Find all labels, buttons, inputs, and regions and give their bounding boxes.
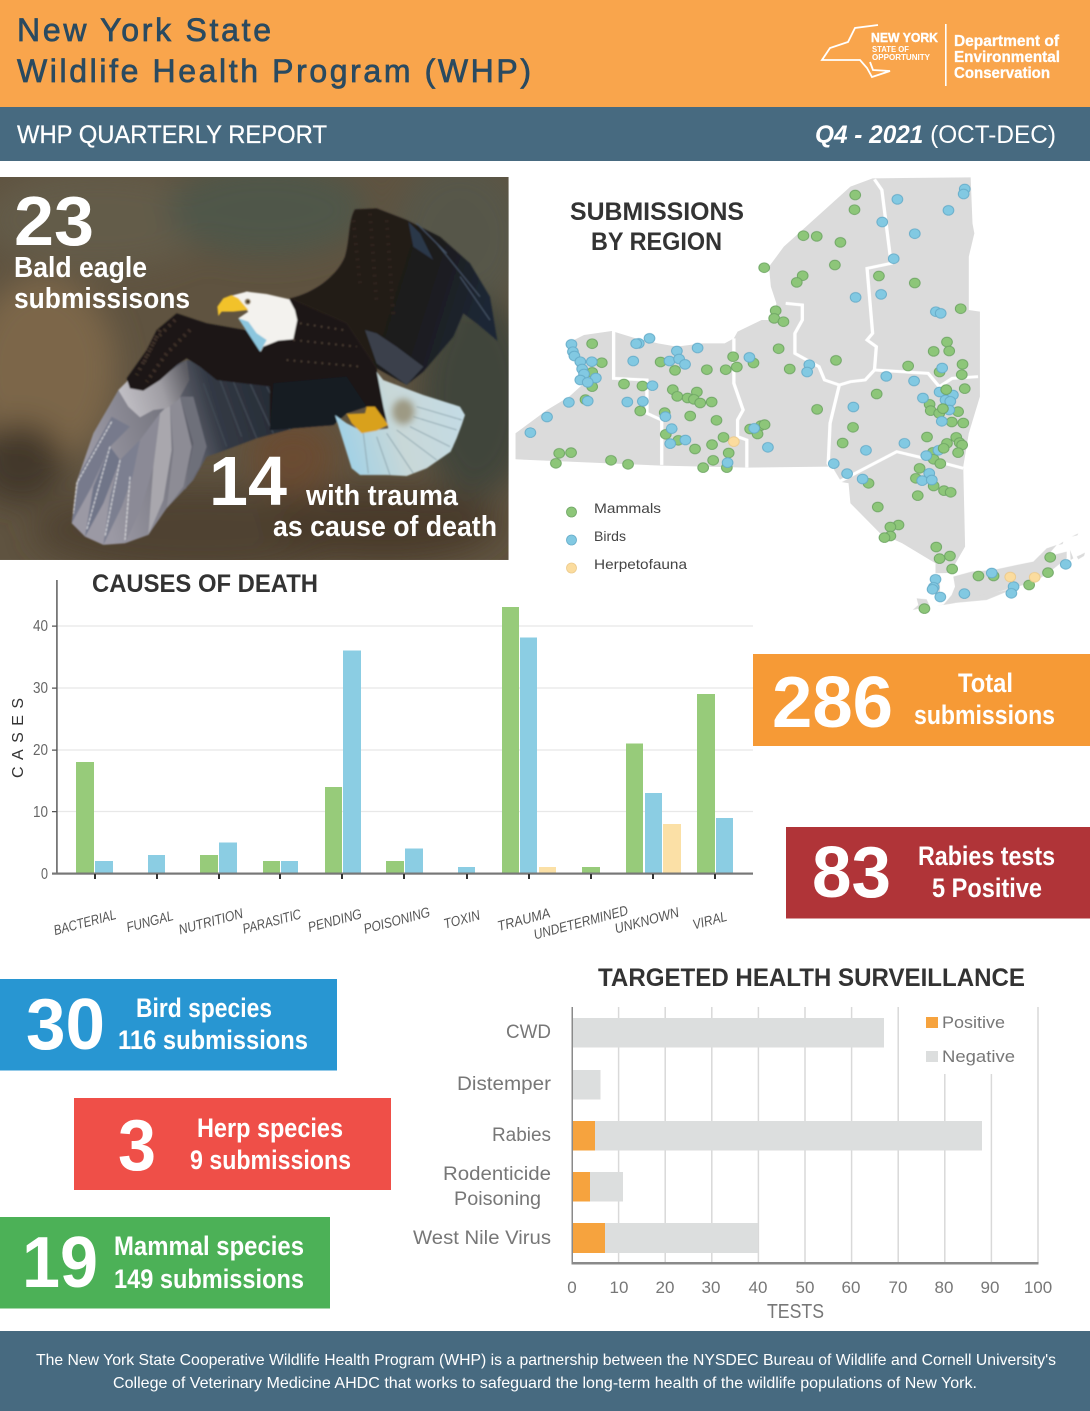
stat: herp species [74,1098,391,1190]
trauma count text [209,442,497,543]
x axis labels: TOXIN [442,906,482,932]
x axis numbers: 20 [656,1278,674,1297]
map legend: Herpetofauna [594,556,687,572]
x axis labels: UNDETERMINED [532,902,630,942]
footer [0,1331,1090,1411]
x axis labels: NUTRITION [177,905,245,937]
x axis numbers: 50 [796,1278,814,1297]
axes [52,580,753,879]
x axis numbers [567,1278,1052,1297]
map legend: Birds [594,528,626,544]
stat: rabies tests: 83 [812,833,891,913]
trauma count text: 14 [209,442,287,520]
bald eagle count text: submissisons [14,283,190,315]
eagle [72,208,497,545]
stat: bird species [0,979,337,1070]
report band: Q4 - 2021 (OCT-DEC) [815,121,1056,149]
bars: mammals [76,607,715,874]
title: New York State [17,12,271,48]
legend [924,1005,1026,1074]
category labels: Distemper [457,1074,552,1095]
heading: submissions by region: BY REGION [591,228,722,256]
stat: herp species: 3 [118,1106,156,1186]
y axis label: CASES [10,698,27,778]
panel: submissions by region map [516,177,1085,613]
panel: bald eagle photo [0,160,533,573]
x axis numbers: 90 [981,1278,999,1297]
legend: Positive [942,1013,1005,1032]
y axis ticks: 30 [33,680,48,697]
category labels [413,1022,552,1249]
footer: The New York State Cooperative Wildlife Health Program (WHP) is a partnership between the NYSDEC Bureau of Wildlife and Cornell University's [36,1352,1056,1369]
heading: submissions by region [570,198,744,256]
x axis numbers: 30 [702,1278,720,1297]
x axis numbers: 40 [749,1278,767,1297]
report band: WHP QUARTERLY REPORT [17,121,327,149]
map legend [566,500,687,573]
eagle: brown coverts [126,312,271,392]
map of New York State [516,177,1085,613]
x axis labels: PENDING [306,905,363,935]
category labels: Rabies [492,1125,551,1146]
dots: mammals [551,190,1056,613]
x axis numbers: 60 [842,1278,860,1297]
x axis labels: PARASITIC [241,905,303,937]
stat: total submissions [753,654,1090,746]
map legend: Mammals [594,500,661,516]
stat: bird species: 30 [26,985,105,1065]
logo: NYS DEC: Environmental [954,49,1060,66]
header banner [0,0,1090,107]
report band [0,107,1090,161]
dots: herpetofauna [728,437,1040,582]
stat: total submissions: 286 [772,663,893,743]
panel: targeted health surveillance chart [413,964,1052,1323]
x axis labels: FUNGAL [124,907,175,935]
x axis labels [52,902,729,942]
eagle: left flight feathers [71,312,293,546]
dots: birds [525,184,1071,602]
category labels: West Nile Virus [413,1228,551,1249]
eagle: right wing [290,208,497,385]
footer: College of Veterinary Medicine AHDC that works to safeguard the long-term health of the wildlife populations of New York. [113,1375,977,1392]
heading: causes of death: CAUSES OF DEATH [92,570,318,598]
stat: total submissions: Total [958,668,1013,698]
stat: total submissions: submissions [914,700,1055,730]
logo: NYS DEC: Conservation [954,65,1050,82]
x axis labels: VIRAL [691,908,729,932]
stat: rabies tests: Rabies tests [918,841,1055,871]
stat: herp species: Herp species [197,1113,343,1143]
stat: bird species: 116 submissions [118,1025,308,1055]
stat: rabies tests [786,827,1090,918]
y axis ticks: 20 [33,742,48,759]
dots: mammals over birds [938,385,952,453]
heading: targeted health surveillance: TARGETED HEALTH SURVEILLANCE [598,964,1025,992]
title: Wildlife Health Program (WHP) [17,53,531,89]
category labels: CWD [506,1022,551,1043]
x axis label: TESTS [767,1301,824,1323]
y axis ticks: 10 [33,804,48,821]
bars: birds [95,638,733,874]
y axis ticks: 0 [41,866,48,883]
x axis numbers: 0 [567,1278,577,1297]
axes [572,1007,1038,1264]
stat: mammal species: 19 [22,1223,98,1303]
logo: NYS DEC: STATE OF [872,45,909,54]
x axis labels: UNKNOWN [613,904,681,936]
x axis numbers: 100 [1024,1278,1052,1297]
stat: bird species: Bird species [136,993,272,1023]
category labels: Poisoning [454,1189,541,1210]
title [17,12,531,89]
stat: rabies tests: 5 Positive [932,873,1042,903]
eagle: tail [335,372,465,476]
eagle: head [217,292,297,352]
x axis labels: BACTERIAL [52,906,118,938]
bars: herpetofauna [539,824,681,874]
y axis ticks [33,618,48,883]
bald eagle count text [14,182,190,315]
y axis ticks: 40 [33,618,48,635]
stat: herp species: 9 submissions [190,1145,351,1175]
stat: mammal species: 149 submissions [114,1264,304,1294]
logo: NYS DEC: NEW YORK [871,30,939,45]
category labels: Rodenticide [443,1164,551,1185]
legend: Negative [942,1047,1015,1066]
logo: NYS DEC [822,24,1060,86]
stat: mammal species: Mammal species [114,1231,304,1261]
x axis numbers: 70 [889,1278,907,1297]
trauma count text: with trauma [305,480,459,512]
x axis numbers: 10 [610,1278,628,1297]
heading: submissions by region: SUBMISSIONS [570,198,744,226]
horizontal bars [572,1018,982,1253]
x axis labels: TRAUMA [496,904,552,934]
bald eagle count text: 23 [14,182,94,260]
x axis labels: POISONING [362,904,432,937]
x axis numbers: 80 [935,1278,953,1297]
stat: mammal species [0,1217,330,1308]
bald eagle count text: Bald eagle [14,252,147,284]
logo: NYS DEC: OPPORTUNITY [872,53,931,62]
panel: causes of death chart [10,570,753,942]
eagle: feet [347,407,388,433]
trauma count text: as cause of death [273,511,497,543]
eagle: body [270,298,465,476]
logo: NYS DEC: Department of [954,33,1060,50]
